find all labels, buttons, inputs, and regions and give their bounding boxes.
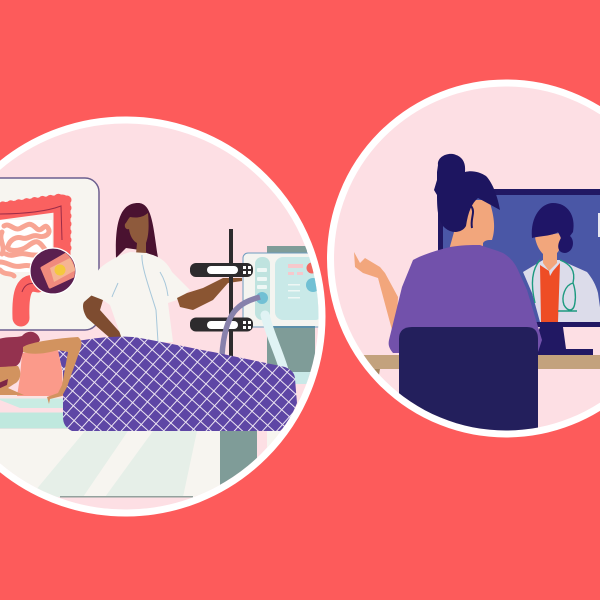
doctor hair — [532, 203, 574, 253]
monitor machine — [243, 246, 323, 384]
magnifier inset — [30, 248, 78, 294]
nurse right arm — [177, 278, 242, 310]
doctor neck and face — [535, 233, 561, 271]
IV pole with clamps — [190, 229, 253, 359]
patient face — [0, 366, 24, 395]
bed — [0, 398, 280, 498]
small intestine backing — [0, 220, 52, 272]
monitor stand — [538, 327, 593, 355]
nurse — [83, 203, 242, 342]
woman hair — [434, 154, 500, 232]
patient arm — [23, 337, 82, 404]
patient hair — [0, 332, 40, 368]
panel: hospital procedure circle — [0, 120, 323, 513]
large intestine — [0, 198, 67, 318]
nurse coat — [90, 252, 190, 342]
doctor shirt — [540, 263, 560, 322]
nurse face — [125, 213, 149, 254]
nurse left arm — [83, 296, 122, 338]
patient — [0, 332, 82, 404]
tubes — [222, 297, 284, 370]
chair — [399, 327, 538, 440]
desk — [363, 355, 600, 375]
doctor on screen — [523, 203, 600, 322]
woman ear and curl — [471, 206, 473, 228]
patient top — [17, 350, 63, 396]
panel: telehealth circle — [330, 83, 600, 440]
woman raised arm and hand — [354, 252, 398, 330]
woman sweater — [389, 245, 542, 353]
blanket — [58, 337, 297, 431]
intestine wall chart — [0, 178, 99, 330]
nurse hair — [116, 203, 158, 258]
woman neck and face — [449, 200, 494, 250]
computer monitor — [438, 189, 600, 355]
small intestine — [0, 224, 49, 276]
stethoscope — [533, 260, 577, 311]
doctor coat — [523, 260, 600, 322]
